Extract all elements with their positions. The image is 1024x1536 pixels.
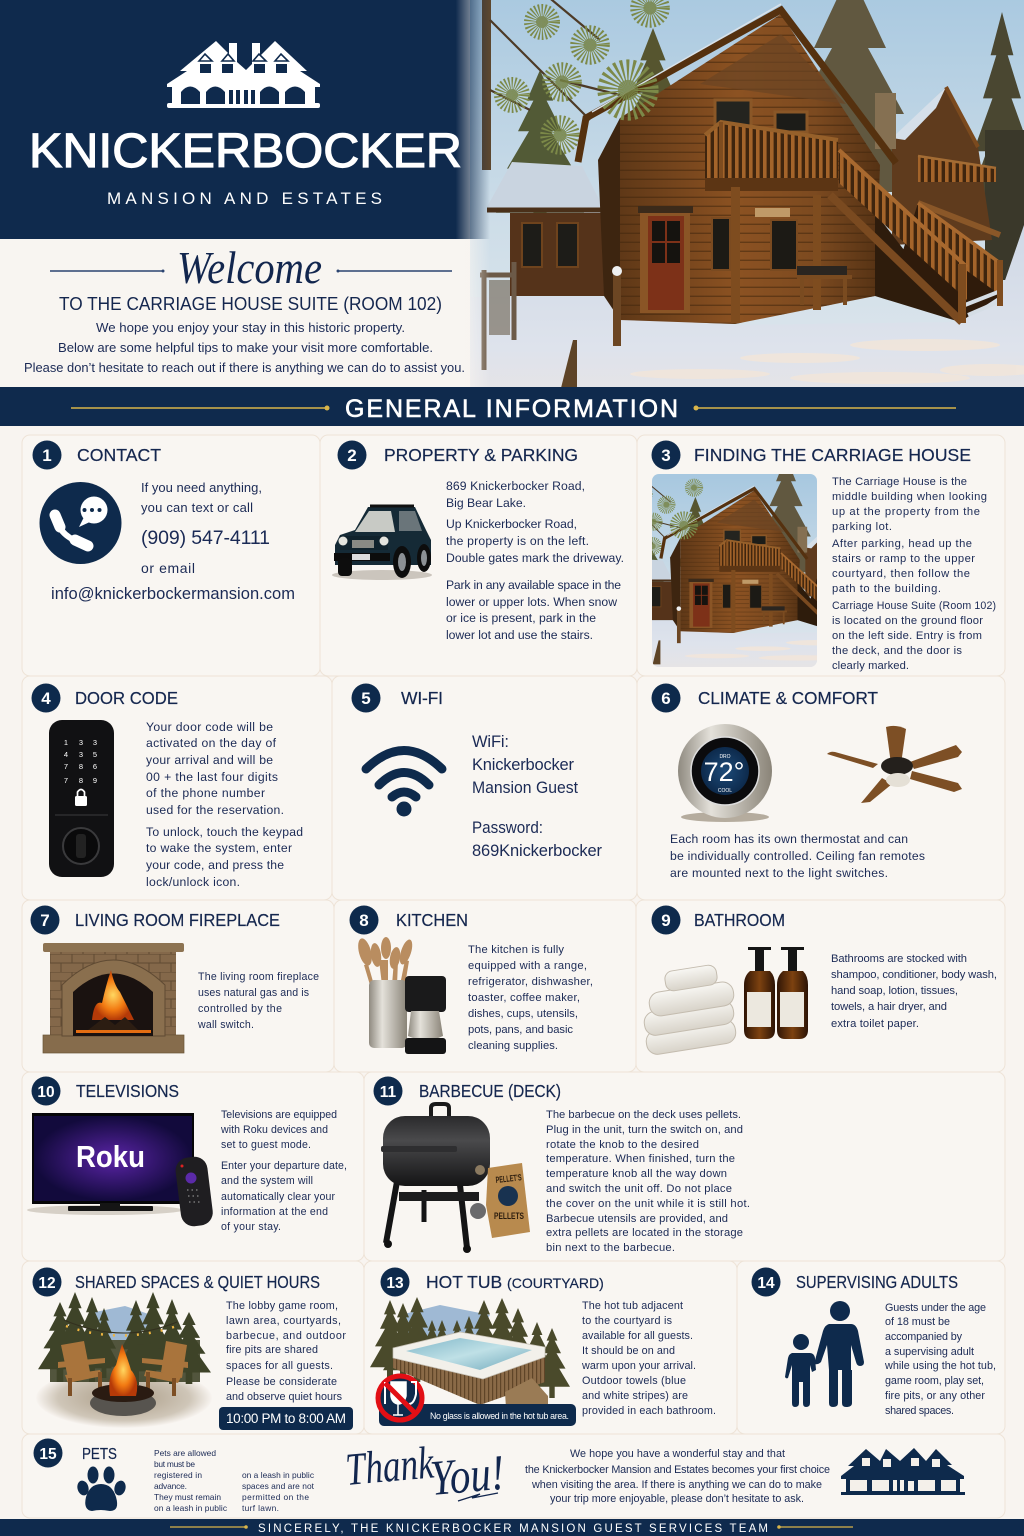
panel: 4 door code: your code, and press the	[146, 858, 284, 872]
panel: 3 finding the carriage house: stairs or ramp to the upper	[832, 553, 975, 565]
panel: 8 kitchen: The kitchen is fully	[468, 944, 564, 956]
panel: 5 wi-fi	[332, 676, 637, 900]
panel: 5 wi-fi: Mansion Guest	[472, 779, 578, 797]
panel: 13 hot tub: Outdoor towels (blue	[582, 1375, 686, 1387]
icon: pellet grill: PELLETS	[494, 1211, 524, 1221]
panel: 3 finding the carriage house: clearly marked.	[832, 660, 909, 672]
icon: fireplace	[43, 943, 184, 1053]
icon: smart lock: 1	[64, 738, 68, 747]
panel: 15 pets and thank you: turf lawn.	[242, 1503, 279, 1513]
panel: 15 pets and thank you: on a leash in public	[154, 1503, 227, 1513]
panel: 11 barbecue: Plug in the unit, turn the switch on, and	[546, 1124, 743, 1136]
icon: TV with Roku: Roku	[76, 1139, 145, 1174]
panel: 9 bathroom	[636, 900, 1005, 1072]
panel: 4 door code: activated on the day of	[146, 736, 277, 750]
panel: 15 pets and thank you: but must be	[154, 1459, 195, 1469]
icon: pellet grill	[381, 1104, 530, 1253]
panel: 4 door code: DOOR CODE	[75, 688, 178, 708]
panel: 13 hot tub: warm upon your arrival.	[581, 1360, 696, 1372]
icon: pellet grill: PELLET'S	[495, 1172, 522, 1185]
panel: 3 finding the carriage house: courtyard, then follow the	[832, 568, 970, 580]
panel: 2 property and parking: Up Knickerbocker Road,	[446, 517, 577, 531]
panel: 11 barbecue: Barbecue utensils are provided, and	[546, 1213, 728, 1225]
icon: smart lock: 6	[93, 762, 97, 771]
panel: 3 finding the carriage house: on the left side. Entry is from	[832, 630, 982, 642]
panel: 10 televisions: information at the end	[221, 1206, 328, 1218]
panel: 1 contact: If you need anything,	[141, 480, 262, 495]
icon: ceiling fan	[827, 726, 962, 803]
footer banner	[0, 1519, 1024, 1536]
panel: 2 property and parking: or ice is present, park in the	[446, 611, 596, 625]
panel: 2 property and parking: Park in any available space in the	[446, 578, 621, 592]
panel: 6 climate and comfort: Each room has its own thermostat and can	[670, 832, 908, 846]
icon: smart lock: 4	[64, 750, 68, 759]
icon: wifi	[366, 750, 442, 812]
icon: no glass	[378, 1376, 422, 1420]
panel: 5 wi-fi: Password:	[472, 819, 543, 837]
panel: 2 property and parking: the property is on the left.	[446, 534, 589, 548]
panel: 1 contact	[22, 435, 320, 676]
callout: no glass bar: No glass is allowed in the hot tub area.	[430, 1411, 569, 1421]
panel: 13 hot tub: The hot tub adjacent	[582, 1300, 683, 1312]
panel: 8 kitchen: KITCHEN	[396, 910, 468, 930]
welcome panel	[0, 239, 490, 387]
panel: 2 property and parking	[320, 435, 637, 676]
panel: 7 living room fireplace: The living room fireplace	[198, 971, 319, 983]
panel: 4 door code: 00 + the last four digits	[146, 770, 278, 784]
panel: 9 bathroom: BATHROOM	[694, 910, 785, 930]
icon: smart lock: 8	[79, 776, 83, 785]
subtitle: MANSION AND ESTATES	[107, 189, 382, 208]
icon: phone with speech bubble	[40, 482, 122, 564]
section banner: general information: GENERAL INFORMATION	[345, 395, 678, 423]
welcome panel: Please don’t hesitate to reach out if there is anything we can do to assist you.	[24, 360, 465, 375]
title: Knickerbocker: KNICKERBOCKER	[29, 125, 462, 178]
panel: 15 pets and thank you: PETS	[82, 1446, 117, 1463]
panel: 12 shared spaces and quiet hours: fire pits are shared	[226, 1344, 318, 1356]
panel: 3 finding the carriage house	[611, 435, 1005, 682]
callout: no glass bar	[378, 1376, 576, 1426]
illustration: hot tub	[370, 1297, 570, 1408]
panel: 1 contact: (909) 547-4111	[141, 527, 270, 549]
panel: 13 hot tub: provided in each bathroom.	[582, 1405, 716, 1417]
panel: 12 shared spaces and quiet hours: The lobby game room,	[226, 1300, 338, 1312]
panel: 15 pets and thank you: on a leash in public	[242, 1470, 314, 1480]
panel: 4 door code: of the phone number	[146, 786, 265, 800]
panel: 5 wi-fi: WI-FI	[401, 688, 443, 708]
panel: 15 pets and thank you: Pets are allowed	[154, 1448, 216, 1458]
panel: 9 bathroom: towels, a hair dryer, and	[831, 1001, 947, 1013]
panel: 14 supervising adults: while using the hot tub,	[884, 1360, 996, 1372]
panel: 2 property and parking: 869 Knickerbocker Road,	[446, 479, 585, 493]
panel: 14 supervising adults: a supervising adult	[885, 1346, 974, 1358]
panel: 15 pets and thank you: 15	[39, 1446, 57, 1463]
icon: mansion silhouette	[841, 1448, 965, 1495]
panel: 13 hot tub: and white stripes) are	[582, 1390, 688, 1402]
panel: 2 property and parking: Double gates mark the driveway.	[446, 551, 624, 565]
panel: 8 kitchen: refrigerator, dishwasher,	[468, 976, 593, 988]
section banner: general information	[0, 387, 1024, 426]
panel: 4 door code: used for the reservation.	[146, 803, 284, 817]
panel: 14 supervising adults: fire pits, or any other	[885, 1390, 985, 1402]
footer banner: SINCERELY, THE KNICKERBOCKER MANSION GUEST SERVICES TEAM	[258, 1523, 768, 1535]
panel: 11 barbecue: temperature. When finished, turn the	[546, 1153, 735, 1165]
panel: 12 shared spaces and quiet hours: Please be considerate	[226, 1376, 337, 1388]
panel: 11 barbecue: The barbecue on the deck uses pellets.	[546, 1109, 741, 1121]
panel: 15 pets and thank you: the Knickerbocker Mansion and Estates becomes your first choice	[525, 1464, 830, 1476]
panel: 1 contact: CONTACT	[77, 445, 161, 465]
panel: 12 shared spaces and quiet hours: spaces for all guests.	[226, 1360, 333, 1372]
panel: 3 finding the carriage house: 3	[661, 446, 671, 465]
panel: 6 climate and comfort	[637, 676, 1005, 900]
panel: 15 pets and thank you: permitted on the	[242, 1492, 309, 1502]
panel: 12 shared spaces and quiet hours: SHARED SPACES & QUIET HOURS	[75, 1272, 320, 1292]
panel: 7 living room fireplace	[22, 900, 334, 1072]
panel: 7 living room fireplace: 7	[40, 911, 50, 930]
panel: 10 televisions: Televisions are equipped	[221, 1109, 337, 1121]
panel: 9 bathroom: hand soap, lotion, tissues,	[831, 985, 958, 997]
panel: 14 supervising adults: of 18 must be	[885, 1316, 950, 1328]
panel: 12 shared spaces and quiet hours: barbecue, and outdoor	[226, 1330, 346, 1342]
icon: thermostat: DRO	[719, 754, 731, 760]
welcome panel: Welcome	[177, 242, 322, 293]
photo: cabin	[652, 474, 817, 667]
panel: 15 pets and thank you: spaces and are not	[242, 1481, 315, 1491]
panel: 3 finding the carriage house: FINDING THE CARRIAGE HOUSE	[694, 445, 971, 465]
header photo: cabin in snow	[470, 0, 1024, 430]
panel: 11 barbecue: temperature knob all the way down	[546, 1168, 727, 1180]
panel: 2 property and parking: 2	[347, 446, 357, 465]
icon: adult and child	[785, 1301, 864, 1407]
panel: 10 televisions: and the system will	[221, 1175, 313, 1187]
icon: SUV	[332, 506, 432, 580]
icon: smart lock: 7	[64, 776, 68, 785]
panel: 4 door code	[22, 676, 332, 900]
panel: 1 contact: info@knickerbockermansion.com	[51, 585, 295, 603]
panel: 4 door code: To unlock, touch the keypad	[146, 825, 303, 839]
panel: 14 supervising adults: Guests under the age	[885, 1302, 986, 1314]
panel: 11 barbecue: the cover on the unit while it is still hot.	[546, 1198, 750, 1210]
panel: 14 supervising adults: accompanied by	[885, 1331, 963, 1343]
panel: 8 kitchen: toaster, coffee maker,	[468, 992, 580, 1004]
panel: 3 finding the carriage house: path to the building.	[832, 583, 941, 595]
icon: thermostat: 72°	[704, 757, 744, 787]
panel: 7 living room fireplace: uses natural gas and is	[198, 987, 309, 999]
panel: 10 televisions	[22, 1072, 364, 1261]
icon: smart lock: 5	[93, 750, 97, 759]
panel: 11 barbecue: BARBECUE (DECK)	[419, 1081, 561, 1101]
panel: 12 shared spaces and quiet hours: 12	[38, 1275, 56, 1292]
panel: 10 televisions: automatically clear your	[221, 1191, 335, 1203]
icon: towels	[643, 964, 737, 1056]
panel: 4 door code: Your door code will be	[146, 720, 273, 734]
script: thank you: Thank	[343, 1436, 437, 1495]
panel: 3 finding the carriage house: up at the property from the	[832, 506, 980, 518]
panel: 11 barbecue	[364, 1072, 1005, 1261]
panel: 7 living room fireplace: LIVING ROOM FIREPLACE	[75, 910, 280, 930]
welcome panel: Below are some helpful tips to make your visit more comfortable.	[58, 340, 433, 355]
panel: 10 televisions: Enter your departure date,	[221, 1160, 347, 1172]
icon: smart lock: 8	[79, 762, 83, 771]
script: thank you	[343, 1436, 507, 1506]
icon: smart lock: 7	[64, 762, 68, 771]
icon: thermostat	[678, 724, 772, 822]
illustration: fire pit and chairs	[36, 1292, 212, 1428]
icon: utensils and coffee maker	[356, 937, 446, 1054]
welcome panel: TO THE CARRIAGE HOUSE SUITE (ROOM 102)	[59, 293, 442, 314]
callout: quiet hours	[219, 1407, 353, 1430]
panel: 13 hot tub: to the courtyard is	[582, 1315, 673, 1327]
panel: 14 supervising adults: 14	[757, 1275, 775, 1292]
panel: 6 climate and comfort: are mounted next to the light switches.	[670, 866, 888, 880]
panel: 15 pets and thank you: They must remain	[154, 1492, 221, 1502]
panel: 11 barbecue: 11	[380, 1084, 397, 1101]
panel: 11 barbecue: extra pellets are located in the storage	[546, 1227, 743, 1239]
panel: 6 climate and comfort: be individually controlled. Ceiling fan remotes	[670, 849, 925, 863]
panel: 6 climate and comfort: CLIMATE & COMFORT	[698, 688, 878, 708]
panel: 15 pets and thank you: We hope you have a wonderful stay and that	[570, 1448, 785, 1460]
icon: smart lock: 3	[93, 738, 97, 747]
panel: 1 contact: 1	[42, 446, 52, 465]
panel: 3 finding the carriage house: The Carriage House is the	[832, 476, 967, 488]
panel: 1 contact: or email	[141, 560, 195, 576]
panel: 5 wi-fi: 5	[361, 689, 371, 708]
panel: 10 televisions: TELEVISIONS	[76, 1081, 179, 1101]
panel: 11 barbecue: rotate the knob to the desired	[546, 1139, 699, 1151]
icon: smart lock: 3	[79, 738, 83, 747]
panel: 13 hot tub	[364, 1261, 737, 1434]
panel: 2 property and parking: Big Bear Lake.	[446, 496, 526, 510]
panel: 15 pets and thank you: registered in	[154, 1470, 202, 1480]
panel: 9 bathroom: extra toilet paper.	[831, 1018, 919, 1030]
panel: 8 kitchen: pots, pans, and basic	[468, 1024, 573, 1036]
panel: 10 televisions: with Roku devices and	[220, 1124, 328, 1136]
panel: 8 kitchen: 8	[359, 911, 369, 930]
panel: 12 shared spaces and quiet hours: lawn area, courtyards,	[226, 1315, 341, 1327]
icon: thermostat: COOL	[718, 788, 732, 794]
panel: 13 hot tub: HOT TUB (COURTYARD)	[426, 1272, 604, 1292]
panel: 12 shared spaces and quiet hours: and observe quiet hours	[226, 1391, 343, 1403]
welcome panel: We hope you enjoy your stay in this historic property.	[96, 320, 405, 335]
panel: 14 supervising adults: shared spaces.	[885, 1405, 954, 1417]
panel: 8 kitchen: equipped with a range,	[468, 960, 587, 972]
panel: 4 door code: 4	[41, 689, 51, 708]
panel: 15 pets and thank you	[22, 1434, 1005, 1518]
callout: quiet hours: 10:00 PM to 8:00 AM	[226, 1411, 346, 1426]
icon: smart lock: 9	[93, 776, 97, 785]
panel: 8 kitchen: dishes, cups, utensils,	[468, 1008, 578, 1020]
panel: 7 living room fireplace: wall switch.	[197, 1019, 254, 1031]
icon: smart lock	[49, 720, 114, 877]
panel: 13 hot tub: available for all guests.	[582, 1330, 693, 1342]
panel: 8 kitchen: cleaning supplies.	[468, 1040, 558, 1052]
panel: 3 finding the carriage house: Carriage House Suite (Room 102)	[832, 600, 996, 612]
panel: 10 televisions: 10	[37, 1084, 55, 1101]
panel: 3 finding the carriage house: the deck, and the door is	[832, 645, 962, 657]
panel: 4 door code: lock/unlock icon.	[146, 875, 240, 889]
panel: 14 supervising adults	[737, 1261, 1005, 1434]
panel: 7 living room fireplace: controlled by the	[198, 1003, 282, 1015]
script: thank you: You!	[428, 1444, 507, 1506]
panel: 15 pets and thank you: when visiting the area. If there is anything we can do to make	[531, 1479, 822, 1491]
panel: 3 finding the carriage house: middle building when looking	[832, 491, 987, 503]
panel: 14 supervising adults: game room, play set,	[885, 1375, 984, 1387]
panel: 15 pets and thank you: advance.	[154, 1481, 187, 1491]
panel: 5 wi-fi: Knickerbocker	[472, 756, 574, 774]
panel: 9 bathroom: 9	[661, 911, 671, 930]
panel: 6 climate and comfort: 6	[661, 689, 671, 708]
icon: amber bottles	[744, 947, 808, 1039]
panel: 2 property and parking: PROPERTY & PARKING	[384, 445, 578, 465]
panel: 13 hot tub: It should be on and	[582, 1345, 675, 1357]
panel: 9 bathroom: shampoo, conditioner, body wash,	[831, 969, 997, 981]
panel: 5 wi-fi: 869Knickerbocker	[472, 842, 602, 860]
header navy panel	[0, 0, 490, 239]
panel: 2 property and parking: lower or upper lots. When snow	[446, 595, 617, 609]
panel: 11 barbecue: and switch the unit off. Do not place	[546, 1183, 732, 1195]
panel: 15 pets and thank you: your trip more enjoyable, please don’t hesitate to ask.	[550, 1493, 804, 1505]
icon: paw print	[76, 1466, 127, 1511]
panel: 4 door code: to wake the system, enter	[146, 841, 292, 855]
panel: 13 hot tub: 13	[386, 1275, 404, 1292]
panel: 3 finding the carriage house: After parking, head up the	[832, 538, 972, 550]
logo: white mansion	[167, 41, 320, 108]
panel: 14 supervising adults: SUPERVISING ADULTS	[796, 1272, 958, 1292]
panel: 12 shared spaces and quiet hours	[22, 1261, 364, 1434]
panel: 3 finding the carriage house: parking lot.	[832, 521, 892, 533]
panel: 4 door code: your arrival and will be	[146, 753, 273, 767]
panel: 9 bathroom: Bathrooms are stocked with	[831, 953, 967, 965]
panel: 10 televisions: of your stay.	[221, 1221, 281, 1233]
icon: TV with Roku	[27, 1113, 214, 1228]
panel: 3 finding the carriage house: is located on the ground floor	[832, 615, 983, 627]
panel: 8 kitchen	[334, 900, 636, 1072]
panel: 10 televisions: set to guest mode.	[221, 1139, 311, 1151]
panel: 11 barbecue: bin next to the barbecue.	[546, 1242, 675, 1254]
panel: 5 wi-fi: WiFi:	[472, 733, 509, 751]
panel: 2 property and parking: lower lot and use the stairs.	[446, 628, 593, 642]
icon: smart lock: 3	[79, 750, 83, 759]
panel: 1 contact: you can text or call	[141, 500, 253, 515]
